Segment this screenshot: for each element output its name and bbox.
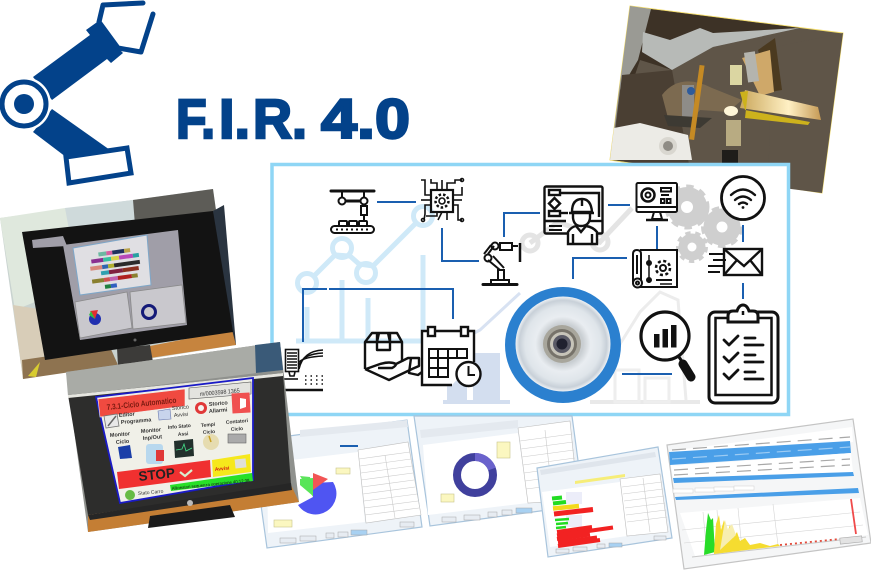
background: gears: [668, 188, 740, 260]
HMI menu labels: Ciclo: [116, 439, 130, 446]
logo: robot arm: [0, 3, 153, 183]
HMI title: 7.3.1-Ciclo Automatico: [106, 396, 177, 412]
HMI screen: Avvisi: [215, 465, 230, 473]
icon: conveyor with robot: [331, 191, 374, 233]
background: light blue trend chart: [296, 206, 433, 341]
icon: engineer with flowchart: [544, 186, 602, 244]
HMI menu labels: Tempi: [201, 422, 216, 429]
icon: microchip with gear: [421, 178, 464, 222]
panel: process diagram: [272, 164, 788, 414]
title: R.: [253, 87, 307, 150]
HMI stop button: [117, 460, 211, 489]
HMI menu labels: Ciclo: [231, 426, 243, 433]
HMI menu labels: Inp/Out: [143, 434, 163, 442]
screenshot: timeline table window: [667, 419, 871, 569]
HMI menu labels: Info Stato: [168, 423, 191, 431]
background: grey trend line: [522, 208, 632, 251]
mini pie on monitor: [89, 310, 101, 325]
HMI menu labels: [110, 400, 249, 446]
HMI menu labels: Ciclo: [203, 429, 215, 436]
HMI screen: m/0003598 1365: [200, 388, 241, 398]
HMI menu labels: Monitor: [110, 431, 131, 439]
HMI screen: Stato Carro: [138, 489, 164, 497]
HMI menu labels: Editor: [119, 412, 136, 419]
photo: monitor with production charts: [0, 189, 236, 379]
screenshot: pie chart window: [252, 420, 422, 548]
title: 0: [375, 87, 410, 150]
HMI menu labels: Storico: [172, 405, 189, 412]
title: F.: [176, 87, 215, 150]
screenshot: bar chart window: [537, 447, 672, 557]
HMI menu labels: Avvisi: [174, 412, 188, 419]
icon: robot arm: [483, 242, 520, 284]
HMI menu labels: Monitor: [141, 427, 162, 435]
icon: calendar with clock: [422, 327, 480, 386]
HMI menu labels: Assi: [178, 431, 189, 438]
icon: wifi: [722, 176, 764, 220]
HMI screen: STOP: [138, 465, 176, 484]
icon: blueprint with gear: [633, 250, 677, 288]
photo: blue wheel with bearing: [505, 287, 621, 403]
HMI screen: [96, 378, 253, 503]
icon: magnifier with bars: [641, 312, 691, 377]
icon: envelope: [708, 249, 762, 275]
icon: monitor dashboard: [636, 183, 677, 220]
icon: clipboard checklist: [709, 305, 778, 403]
title: I.: [219, 87, 250, 150]
icon: 3D printer: [284, 350, 323, 390]
HMI menu labels: Storico: [209, 400, 229, 408]
HMI menu labels: Allarmi: [209, 407, 228, 415]
title: 4.: [321, 87, 375, 150]
icon: hand holding box: [365, 333, 422, 380]
HMI menu labels: Contatori: [226, 418, 249, 426]
chart bars on monitor: [88, 247, 143, 291]
HMI menu labels: Programma: [121, 417, 153, 426]
screenshot: donut chart window: [414, 416, 584, 526]
background: factory silhouette: [443, 292, 700, 402]
photo: HMI touch screen monitor: [66, 342, 299, 532]
connectors: [303, 202, 743, 374]
HMI screen: Allineatori sequenza operazione 40:12:38: [172, 478, 250, 491]
photo: robotic arm in plant: [610, 6, 843, 193]
mini donut on monitor: [142, 306, 156, 318]
